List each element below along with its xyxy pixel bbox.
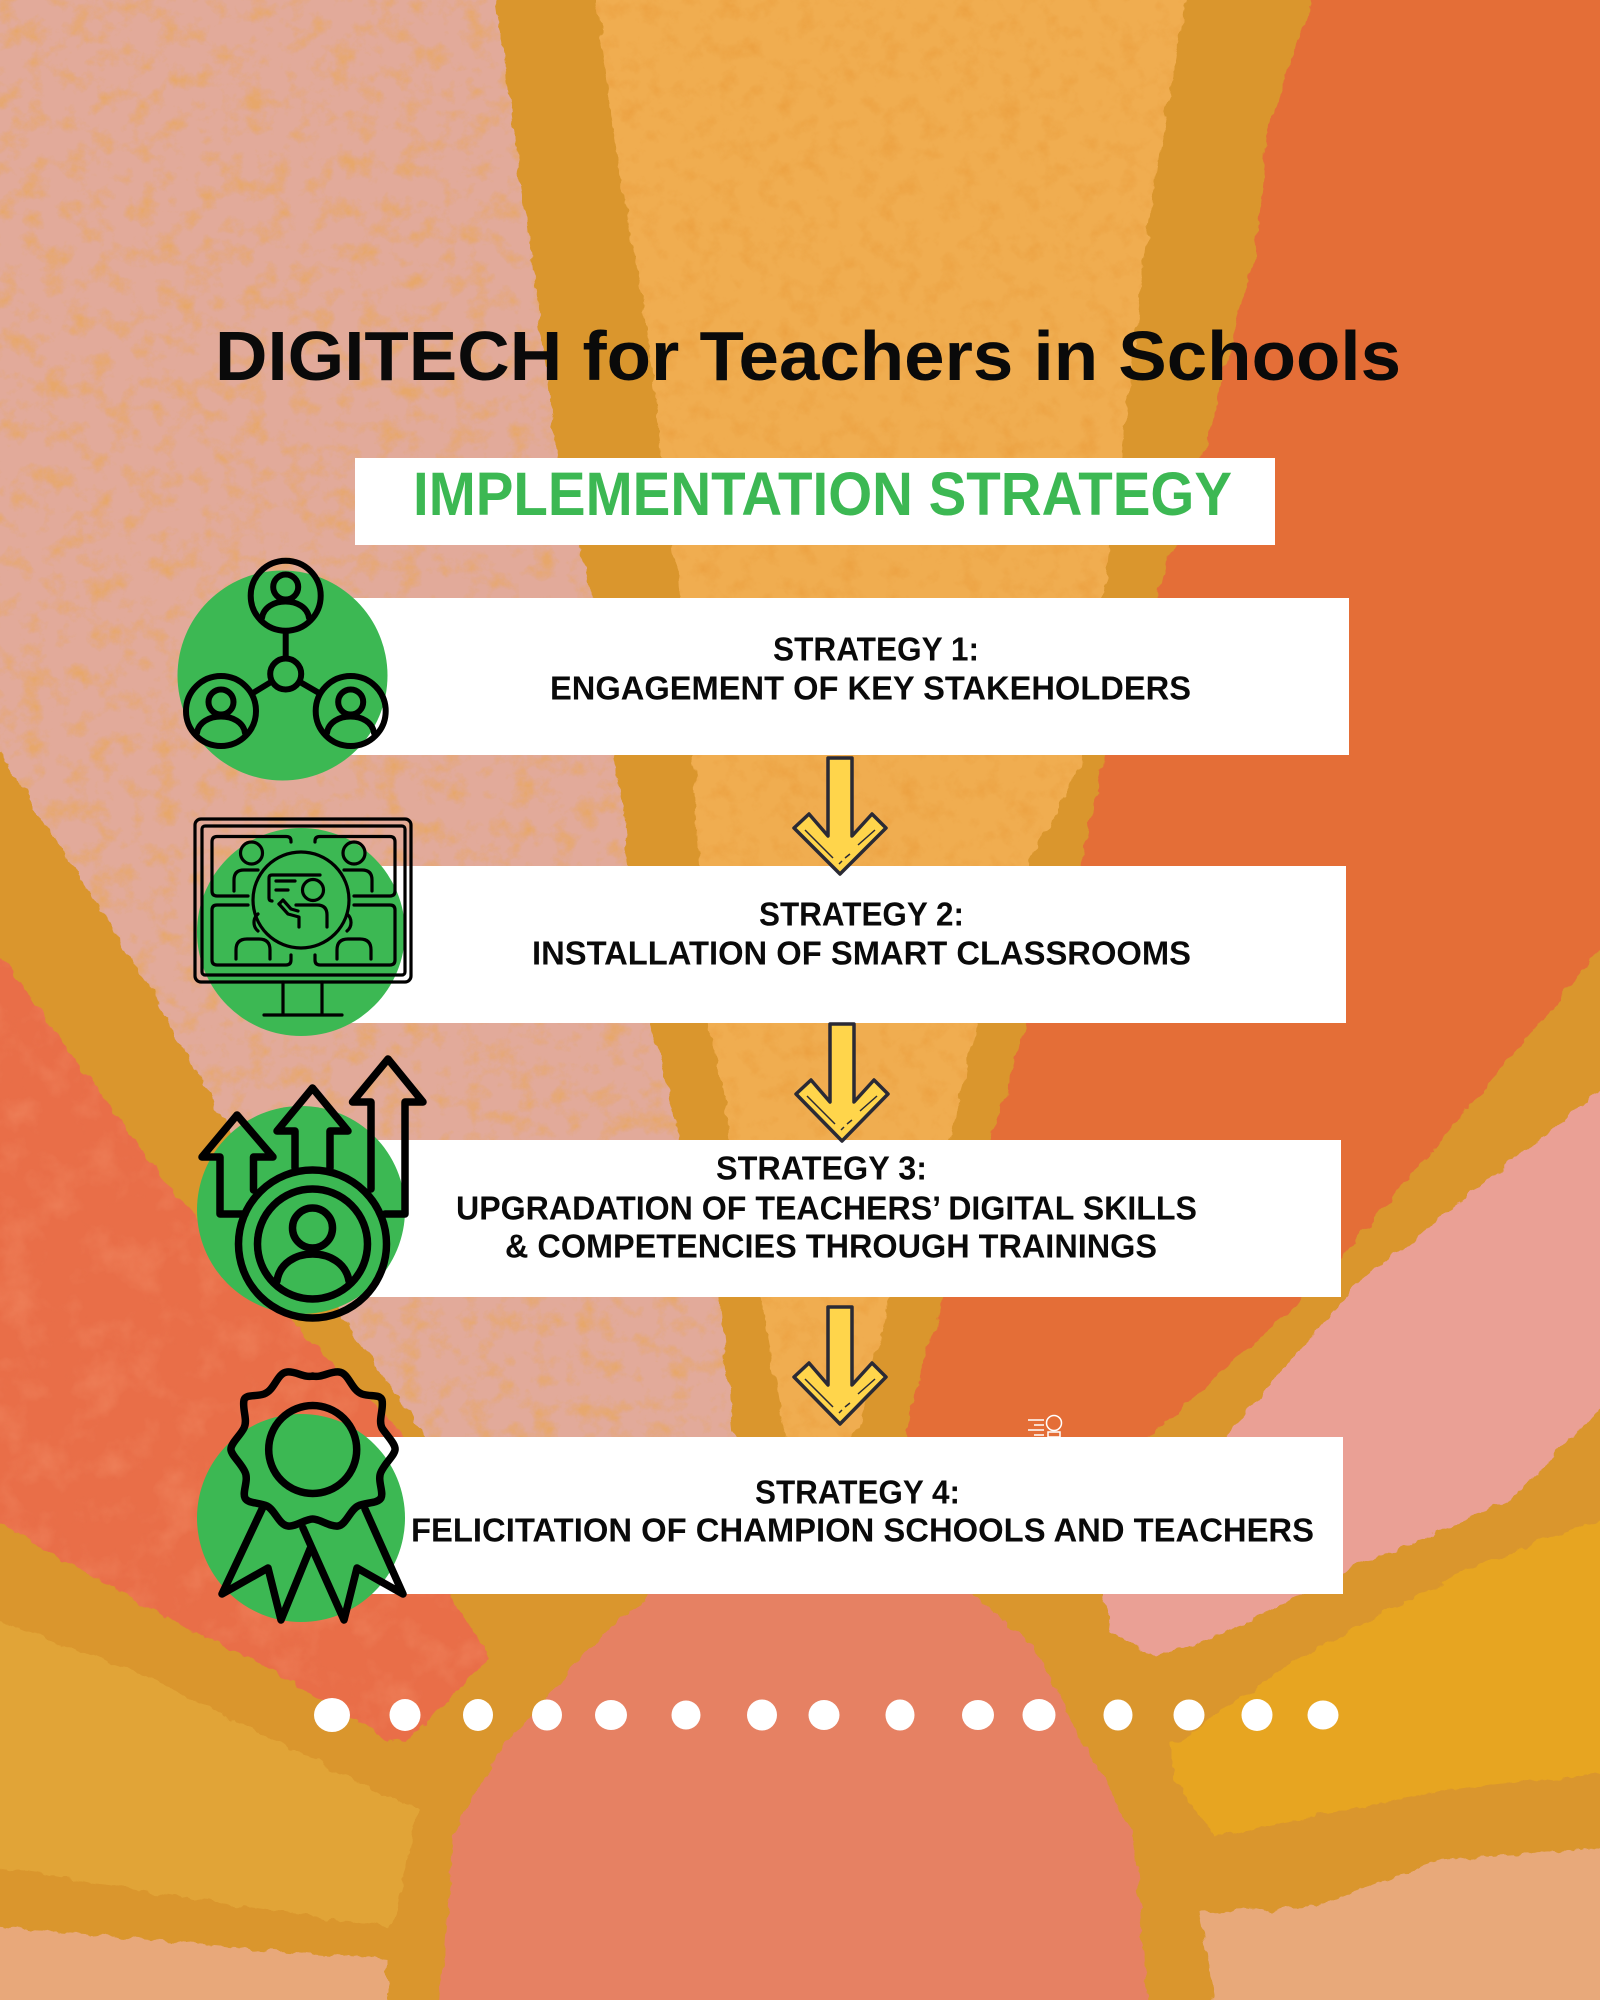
subtitle banner: implementation strategy: IMPLEMENTATION STRATEGY — [413, 460, 1232, 528]
icon: stakeholders network — [178, 561, 388, 780]
panel: strategy 3 — [320, 1140, 1341, 1297]
strategy 3 text — [456, 1150, 1197, 1264]
strategy 4 text: STRATEGY 4: — [755, 1474, 960, 1510]
strategy 1 text — [550, 630, 1191, 706]
panel: strategy 4 — [320, 1437, 1343, 1594]
strategy 3 text: UPGRADATION OF TEACHERS’ DIGITAL SKILLS — [456, 1190, 1197, 1226]
strategy 3 text: & COMPETENCIES THROUGH TRAININGS — [505, 1228, 1157, 1264]
panel: strategy 2 — [320, 866, 1346, 1023]
strategy 4 text: FELICITATION OF CHAMPION SCHOOLS AND TEACHERS — [411, 1512, 1314, 1548]
strategy 1 text: STRATEGY 1: — [773, 630, 979, 668]
decorative row of white dots — [314, 1698, 1338, 1732]
strategy 2 text: INSTALLATION OF SMART CLASSROOMS — [532, 934, 1191, 972]
icon: smart classroom monitor — [195, 819, 411, 1036]
strategy 2 text: STRATEGY 2: — [759, 896, 964, 932]
arrow: strategy 1 to 2 — [794, 758, 886, 874]
strategy 1 text: ENGAGEMENT OF KEY STAKEHOLDERS — [550, 670, 1191, 706]
arrow: strategy 2 to 3 — [796, 1024, 888, 1141]
small white lightbulb mark — [1028, 1416, 1062, 1437]
panel: strategy 1 — [300, 598, 1349, 755]
title: DIGITECH for Teachers in Schools — [215, 317, 1401, 395]
arrow: strategy 3 to 4 — [794, 1307, 886, 1424]
strategy 4 text — [411, 1474, 1314, 1548]
icon: upskilling arrows and person — [197, 1059, 423, 1318]
strategy 3 text: STRATEGY 3: — [716, 1150, 927, 1186]
strategy 2 text — [532, 896, 1191, 972]
icon: award rosette — [197, 1372, 405, 1622]
